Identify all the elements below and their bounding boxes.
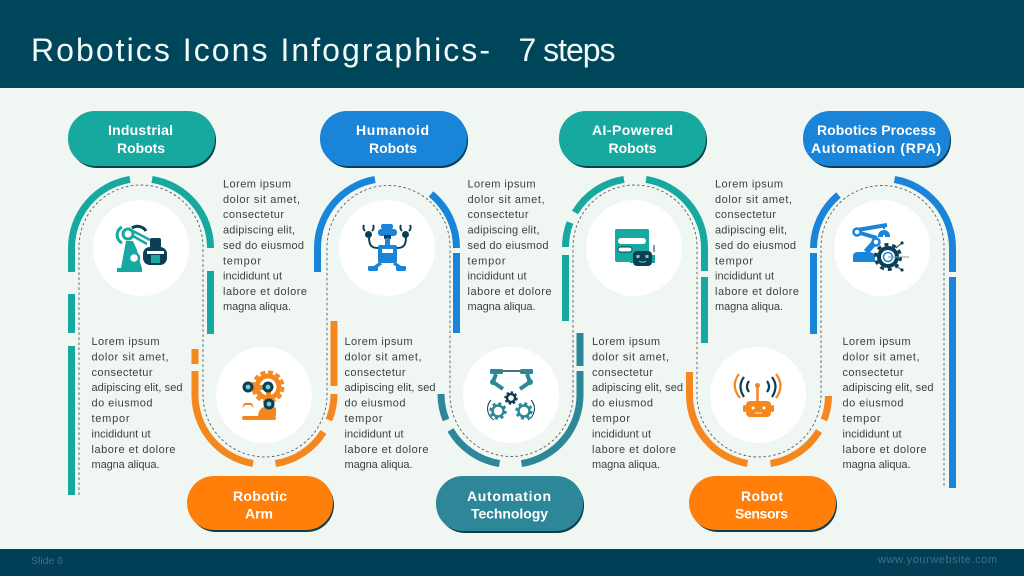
- description text: incididunt ut: [468, 271, 526, 283]
- pill heading: Automation Technology: Technology: [471, 506, 548, 522]
- teal segmented outline: [566, 179, 704, 343]
- panel: step 6 Robot Sensors: [592, 336, 837, 532]
- icon: twin robot arms and gears: [488, 369, 534, 420]
- description text: labore et dolore: [592, 444, 676, 456]
- orange segmented outline: [690, 372, 828, 464]
- icon: robot arm with target gear: [853, 225, 909, 272]
- description text: dolor sit amet,: [344, 351, 422, 363]
- description text: adipiscing elit, sed: [592, 382, 683, 394]
- description text: adipiscing elit, sed: [92, 382, 182, 394]
- description text: adipiscing elit, sed: [842, 382, 934, 394]
- description text: incididunt ut: [92, 428, 150, 440]
- description text: dolor sit amet,: [842, 351, 920, 363]
- description text: incididunt ut: [715, 271, 774, 283]
- panel: step 1 Industrial Robots: [68, 111, 307, 495]
- pill heading: Robotics Process Automation (RPA): [803, 111, 951, 168]
- description text: consectetur: [468, 209, 529, 221]
- description text: tempor: [468, 255, 506, 267]
- description text: consectetur: [92, 367, 153, 379]
- blue segmented outline: [318, 180, 457, 333]
- description text: labore et dolore: [715, 286, 799, 298]
- pill heading: Automation Technology: [436, 476, 584, 533]
- description text: magna aliqua.: [223, 301, 291, 313]
- pill heading: Robotic Arm: [187, 476, 334, 532]
- icon circle: [834, 200, 930, 296]
- header band: [0, 0, 1024, 88]
- description text: do eiusmod: [592, 398, 653, 410]
- pill heading: Robot Sensors: Sensors: [735, 506, 788, 522]
- description text: consectetur: [842, 367, 904, 379]
- slide number: Slide 6: [31, 555, 63, 567]
- icon: robotic arm with gear: [242, 372, 283, 420]
- blue segmented outline: [814, 180, 952, 488]
- description text: adipiscing elit,: [715, 225, 787, 237]
- panel: step 3 Humanoid Robots: [318, 111, 552, 333]
- description text: dolor sit amet,: [223, 194, 300, 206]
- pill heading: Industrial Robots: Robots: [117, 140, 165, 156]
- icon circle: [216, 347, 312, 443]
- pill heading: Robotics Process Automation (RPA): Automation (RPA): [811, 140, 941, 156]
- description text: tempor: [592, 413, 630, 425]
- description text: sed do eiusmod: [223, 240, 304, 252]
- teal segmented outline: [72, 179, 210, 495]
- description text: Lorem ipsum: [344, 336, 412, 348]
- description text: Lorem ipsum: [842, 336, 910, 348]
- icon circle: [710, 347, 806, 443]
- description text: consectetur: [715, 209, 776, 221]
- description text: magna aliqua.: [344, 459, 412, 471]
- title: 7 steps: [518, 32, 616, 68]
- description text: magna aliqua.: [92, 459, 160, 471]
- pill heading: Robot Sensors: [689, 476, 837, 532]
- description text: Lorem ipsum: [92, 336, 160, 348]
- pill heading: Robot Sensors: Robot: [741, 488, 783, 504]
- description text: dolor sit amet,: [592, 351, 669, 363]
- title: Robotics Icons Infographics-: [31, 32, 490, 68]
- icon circle: [93, 200, 189, 296]
- panel: step 2 Robotic Arm: [92, 321, 334, 532]
- description text: Lorem ipsum: [592, 336, 660, 348]
- icon: robot with sensor waves: [735, 374, 780, 417]
- pill heading: Automation Technology: Automation: [467, 488, 551, 504]
- pill heading: Humanoid Robots: [320, 111, 468, 168]
- description text: Lorem ipsum: [468, 178, 536, 190]
- pill heading: AI-Powered Robots: [559, 111, 707, 168]
- description text: magna aliqua.: [715, 301, 783, 313]
- description text: Lorem ipsum: [715, 178, 783, 190]
- dark teal segmented outline: [441, 333, 580, 464]
- description text: tempor: [223, 255, 261, 267]
- panel: step 5 AI-Powered Robots: [559, 111, 799, 343]
- description text: do eiusmod: [842, 398, 904, 410]
- description text: labore et dolore: [92, 444, 176, 456]
- description text: tempor: [842, 413, 881, 425]
- website address: www.yourwebsite.com: [877, 554, 997, 566]
- pill heading: Industrial Robots: [68, 111, 216, 168]
- orange segmented outline: [195, 321, 334, 464]
- description text: tempor: [715, 255, 753, 267]
- pill heading: AI-Powered Robots: Robots: [608, 140, 657, 156]
- description text: adipiscing elit, sed: [344, 382, 436, 394]
- description text: incididunt ut: [344, 428, 404, 440]
- panel: step 7 Robotics Process Automation: [803, 111, 952, 488]
- description text: sed do eiusmod: [715, 240, 796, 252]
- pill heading: Humanoid Robots: Humanoid: [356, 122, 429, 138]
- description text: adipiscing elit,: [223, 225, 295, 237]
- description text: consectetur: [223, 209, 284, 221]
- pill heading: Robotic Arm: Arm: [245, 506, 273, 522]
- panel: step 4 Automation Technology: [344, 333, 584, 533]
- icon circle: [339, 200, 435, 296]
- icon circle: [586, 200, 682, 296]
- description text: labore et dolore: [468, 286, 552, 298]
- description text: consectetur: [592, 367, 653, 379]
- dashed connector path: [79, 185, 944, 495]
- description text: labore et dolore: [842, 444, 926, 456]
- description text: adipiscing elit,: [468, 225, 540, 237]
- description text: labore et dolore: [344, 444, 428, 456]
- description text: dolor sit amet,: [468, 194, 544, 206]
- description text: incididunt ut: [592, 428, 651, 440]
- pill heading: AI-Powered Robots: AI-Powered: [592, 122, 673, 138]
- description text: consectetur: [344, 367, 406, 379]
- description text: do eiusmod: [92, 398, 152, 410]
- description text: magna aliqua.: [468, 301, 536, 313]
- description text: magna aliqua.: [592, 459, 660, 471]
- icon circle: [463, 347, 559, 443]
- description text: magna aliqua.: [842, 459, 910, 471]
- description text: dolor sit amet,: [92, 351, 168, 363]
- description text: labore et dolore: [223, 286, 307, 298]
- description text: Lorem ipsum: [223, 178, 291, 190]
- icon: humanoid robot: [363, 224, 411, 271]
- description text: tempor: [92, 413, 130, 425]
- description text: incididunt ut: [842, 428, 902, 440]
- description text: do eiusmod: [344, 398, 406, 410]
- description text: tempor: [344, 413, 383, 425]
- description text: sed do eiusmod: [468, 240, 548, 252]
- pill heading: Humanoid Robots: Robots: [369, 140, 417, 156]
- icon: industrial robot arm: [117, 226, 167, 272]
- description text: dolor sit amet,: [715, 194, 792, 206]
- pill heading: Robotic Arm: Robotic: [233, 488, 287, 504]
- description text: incididunt ut: [223, 271, 282, 283]
- icon: AI browser window with robot: [615, 229, 655, 266]
- footer band: [0, 549, 1024, 576]
- pill heading: Robotics Process Automation (RPA): Robotics Process: [817, 122, 936, 138]
- pill heading: Industrial Robots: Industrial: [108, 122, 173, 138]
